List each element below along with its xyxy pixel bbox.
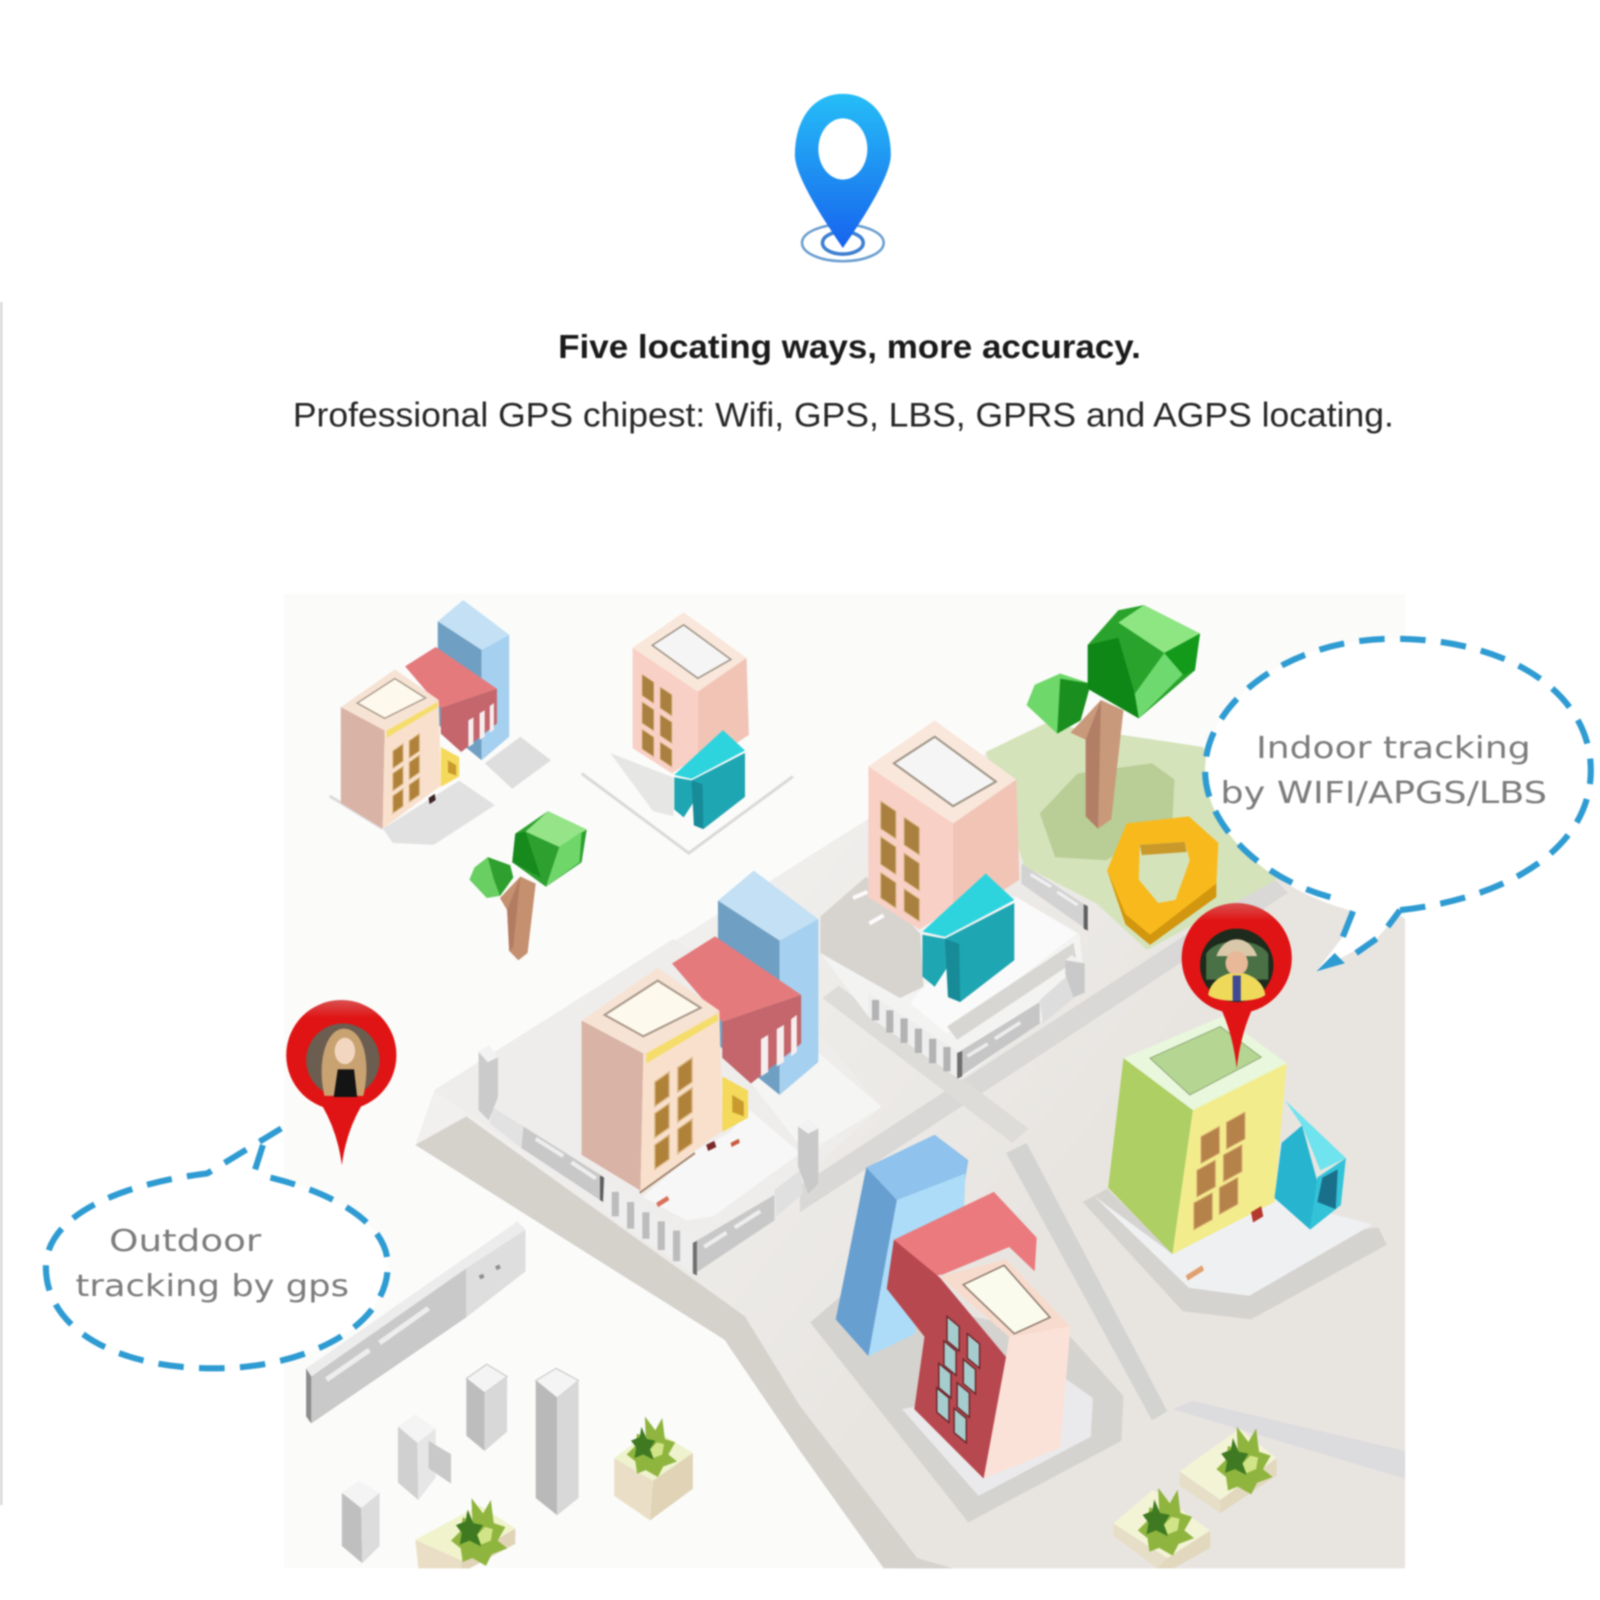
building: top-left block xyxy=(330,600,551,845)
concrete columns xyxy=(342,1364,579,1563)
building: centre block xyxy=(582,871,818,1191)
roads xyxy=(415,878,1405,1568)
building: lime block with teal annex xyxy=(1083,1016,1387,1319)
park lawn xyxy=(986,723,1277,950)
wall segment xyxy=(306,1221,526,1423)
title: Five locating ways, more accuracy. xyxy=(558,329,1141,366)
tree: small xyxy=(469,811,587,960)
lot: centre-right building xyxy=(820,877,1085,1080)
callout text: indoor: Indoor tracking xyxy=(1256,731,1531,766)
callout: indoor tracking xyxy=(1205,639,1591,971)
callout text: wifi: by WIFI/APGS/LBS xyxy=(1220,776,1547,811)
map ground xyxy=(284,594,1405,1568)
marker: man photo pin xyxy=(1182,903,1292,1068)
fence: centre lot xyxy=(479,1046,818,1276)
callout text: gps: tracking by gps xyxy=(76,1269,349,1304)
callout text: outdoor: Outdoor xyxy=(109,1224,262,1259)
fence: centre-right lot xyxy=(868,863,1088,1079)
building: centre-right pink block xyxy=(868,720,1019,1002)
subtitle: Professional GPS chipest: Wifi, GPS, LBS, GPRS and AGPS locating. xyxy=(293,397,1394,435)
left edge rule xyxy=(0,302,3,1505)
building: bottom red and blue block xyxy=(810,1135,1123,1522)
callout: outdoor tracking xyxy=(46,1124,388,1368)
tree: large xyxy=(1027,605,1200,829)
icon: yellow map marker shape xyxy=(1107,816,1218,945)
building: top-centre pink block xyxy=(582,612,793,853)
icon: blue location pin xyxy=(795,94,891,261)
lot: centre building xyxy=(435,939,882,1276)
marker: woman photo pin xyxy=(286,1000,396,1165)
planters xyxy=(415,1416,1277,1568)
panel: isometric city map xyxy=(284,594,1405,1568)
